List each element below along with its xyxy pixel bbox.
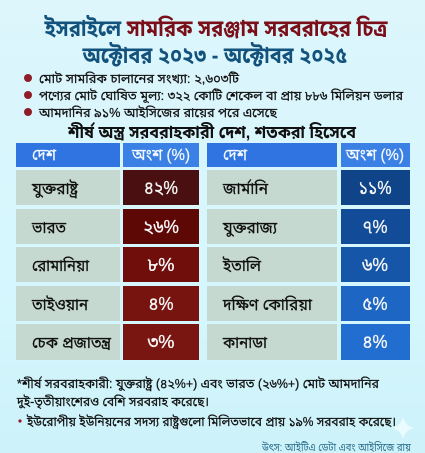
key facts list: আমদানির ৯১% আইসিজের রায়ের পরে এসেছে (38, 105, 278, 120)
row: Germany (207, 170, 410, 205)
key facts list: মোট সামরিক চালানের সংখ্যা: ২,৬০৩টি (39, 71, 240, 86)
row: Taiwan: তাইওয়ান (31, 295, 88, 314)
row: Canada: কানাডা (222, 335, 268, 352)
row: United Kingdom: যুক্তরাজ্য (222, 220, 278, 237)
row: Czech Republic (16, 324, 199, 360)
row: United States (16, 170, 199, 205)
row: Taiwan: ৪% (148, 294, 174, 314)
icon: sparkle (392, 417, 414, 439)
row: Canada: ৪% (362, 332, 388, 352)
row: Canada (207, 324, 410, 360)
key facts list (24, 71, 403, 120)
left table (16, 143, 199, 360)
row: Czech Republic: ৩% (148, 332, 174, 352)
left table header: দেশ (32, 147, 57, 164)
right table header: দেশ (223, 147, 248, 164)
title: ইসরাইলে সামরিক সরঞ্জাম সরবরাহের চিত্র (44, 14, 388, 41)
right table (207, 143, 410, 360)
row: Germany: জার্মানি (222, 179, 268, 198)
title (44, 14, 388, 68)
row: South Korea: দক্ষিণ কোরিয়া (222, 295, 313, 314)
row: Italy: ইতালি (222, 256, 261, 275)
footnote: দুই-তৃতীয়াংশেরও বেশি সরবরাহ করেছে। (16, 394, 209, 409)
row: India: ২৬% (143, 217, 179, 237)
row: South Korea (207, 286, 410, 321)
row: Italy (207, 247, 410, 282)
right table header (207, 143, 410, 167)
table heading: শীর্ষ অস্ত্র সরবরাহকারী দেশ, শতকরা হিসেবে (67, 122, 357, 142)
row: India (16, 209, 199, 244)
footnote: *শীর্ষ সরবরাহকারী: যুক্তরাষ্ট্র (৪২%+) এবং ভারত (২৬%+) মোট আমদানির (17, 376, 379, 392)
row: United States: ৪২% (144, 178, 178, 198)
row: Romania (16, 247, 199, 282)
row: Germany: ১১% (358, 178, 392, 198)
row: Romania: রোমানিয়া (32, 256, 90, 275)
key facts list: পণ্যের মোট ঘোষিত মূল্য: ৩২২ কোটি শেকেল বা প্রায় ৮৮৬ মিলিয়ন ডলার (39, 88, 403, 104)
row: India: ভারত (31, 220, 67, 237)
row: United States: যুক্তরাষ্ট্র (31, 179, 78, 199)
row: Romania: ৮% (148, 255, 174, 275)
left table header (16, 143, 199, 167)
footnote: ইউরোপীয় ইউনিয়নের সদস্য রাষ্ট্রগুলো মিলিতভাবে প্রায় ১৯% সরবরাহ করেছে। (26, 414, 396, 429)
row: Czech Republic: চেক প্রজাতন্ত্র (32, 335, 111, 352)
row: Taiwan (16, 286, 199, 321)
row: Italy: ৬% (362, 255, 388, 275)
row: United Kingdom (207, 209, 410, 244)
row: United Kingdom: ৭% (362, 217, 388, 237)
title: অক্টোবর ২০২৩ - অক্টোবর ২০২৫ (82, 41, 348, 68)
row: South Korea: ৫% (362, 294, 388, 314)
footnote (16, 376, 396, 429)
left table header: অংশ (%) (131, 147, 190, 164)
right table header: অংশ (%) (345, 147, 404, 164)
